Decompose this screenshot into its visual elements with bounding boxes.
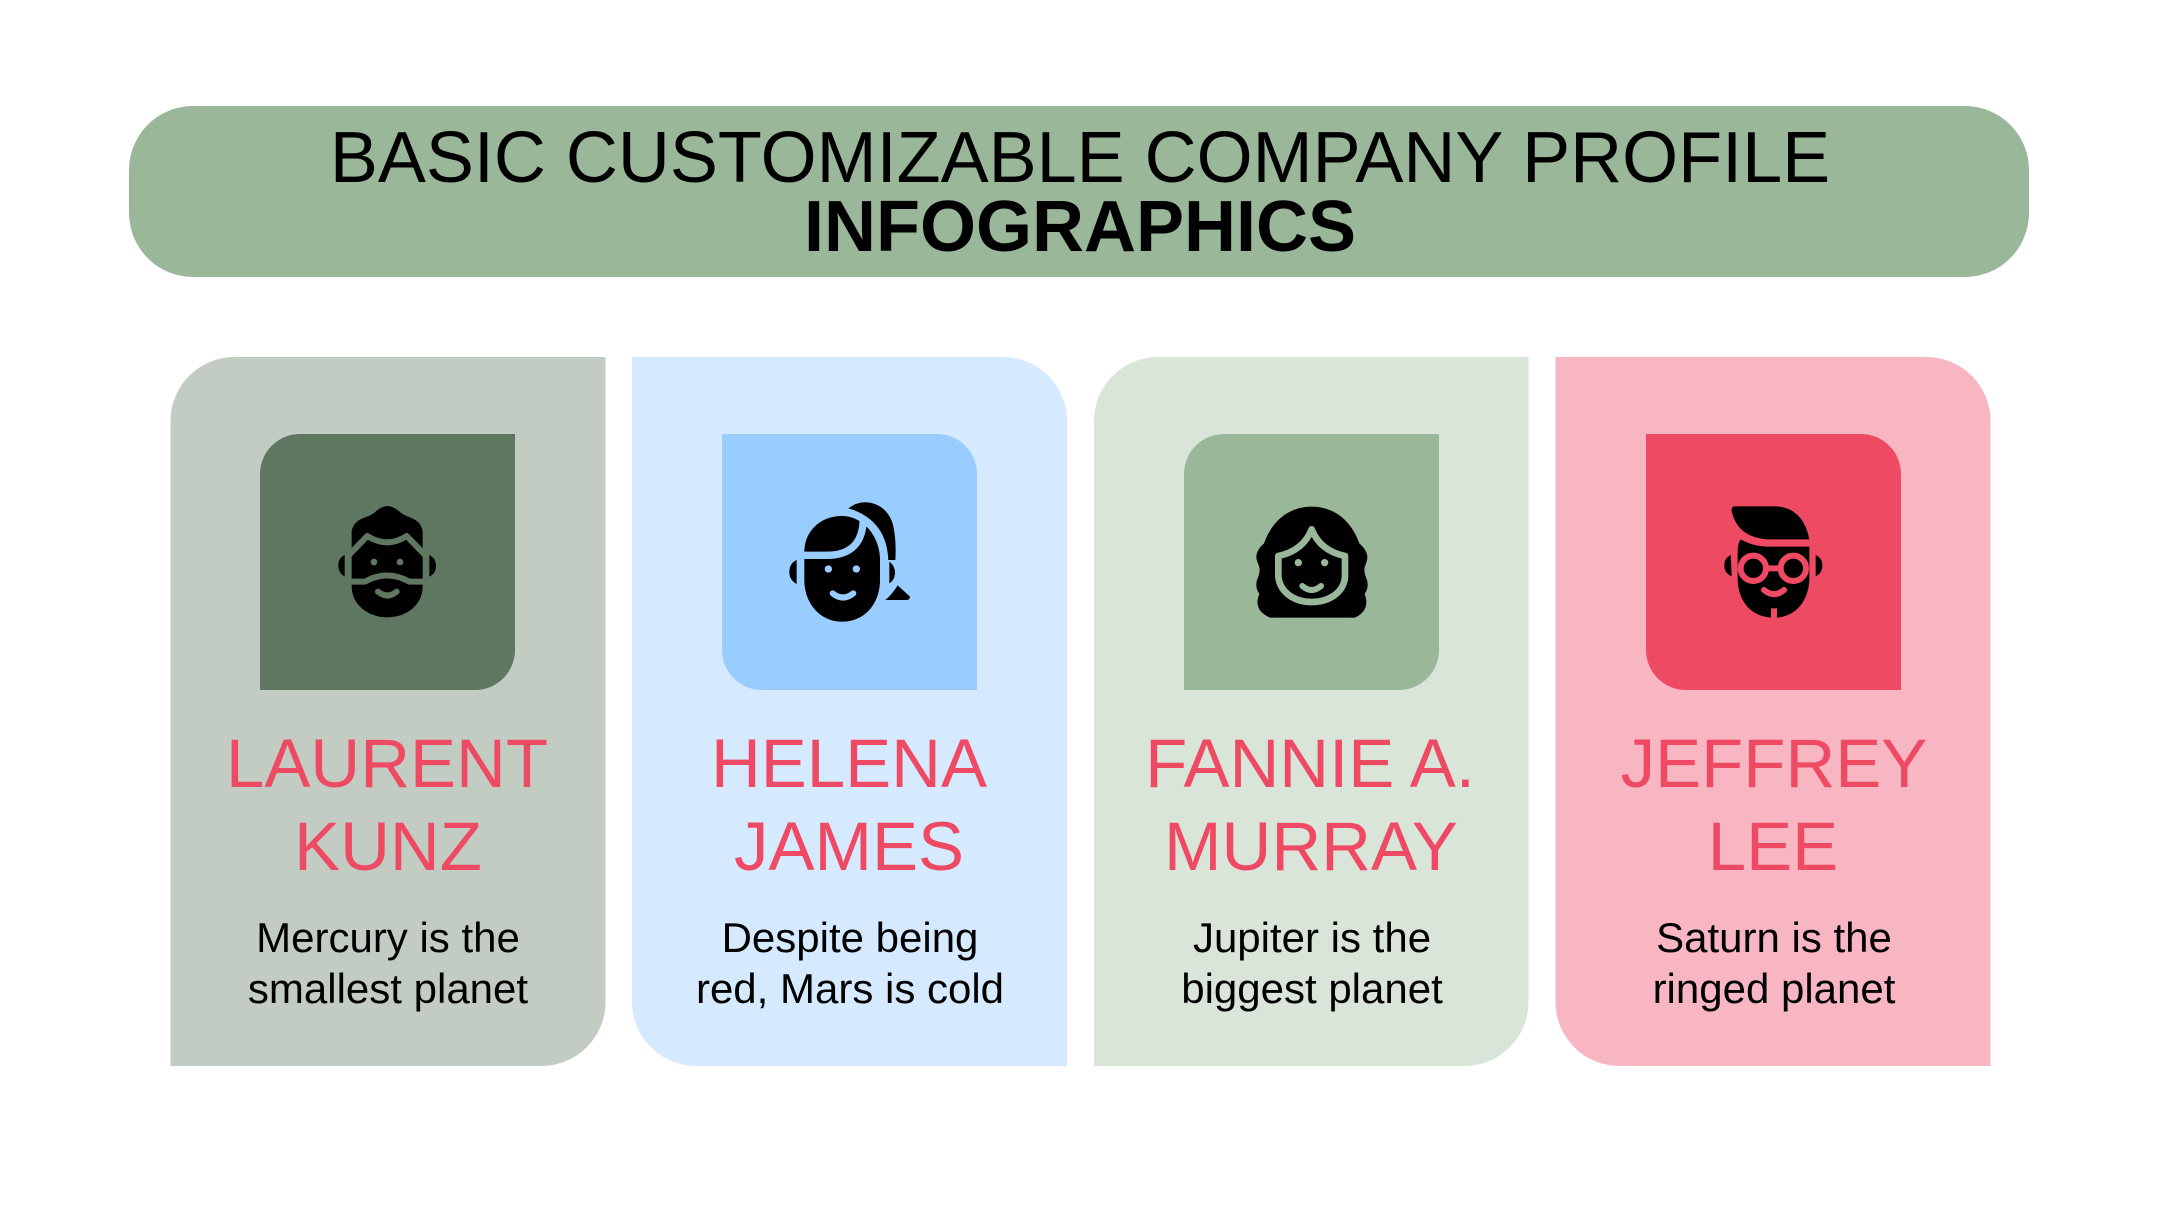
- description: ringed planet: [1653, 965, 1896, 1012]
- avatar tile: [1184, 434, 1439, 690]
- title line 1: BASIC CUSTOMIZABLE COMPANY PROFILE: [330, 118, 1830, 198]
- description: Jupiter is the: [1193, 914, 1431, 961]
- title banner: [129, 106, 2029, 277]
- description: [696, 914, 1004, 1012]
- avatar tile: [260, 434, 515, 690]
- description: Saturn is the: [1656, 914, 1892, 961]
- name: LEE: [1708, 808, 1838, 885]
- panel background: [1556, 357, 1990, 1066]
- icon: man with glasses: [1724, 506, 1822, 620]
- panel background: [632, 357, 1067, 1066]
- name: [711, 725, 987, 885]
- name: MURRAY: [1164, 808, 1458, 885]
- panel: Fannie A. Murray: [1094, 357, 1528, 1066]
- description: Mercury is the: [256, 914, 520, 961]
- name: JAMES: [734, 808, 964, 885]
- name: KUNZ: [294, 808, 482, 885]
- avatar tile: [722, 434, 977, 690]
- description: red, Mars is cold: [696, 965, 1004, 1012]
- name: [1621, 725, 1927, 885]
- name: FANNIE A.: [1145, 725, 1475, 802]
- icon: woman with wavy hair: [1256, 507, 1368, 618]
- name: JEFFREY: [1621, 725, 1927, 802]
- name: HELENA: [711, 725, 987, 802]
- icon: bearded man: [338, 506, 436, 617]
- description: [248, 914, 528, 1012]
- avatar tile: [1646, 434, 1901, 690]
- name: [1145, 725, 1475, 885]
- icon: woman with ponytail: [789, 502, 910, 622]
- description: Despite being: [722, 914, 978, 961]
- panel: Jeffrey Lee: [1556, 357, 1990, 1066]
- description: smallest planet: [248, 965, 528, 1012]
- panel background: [170, 357, 606, 1066]
- description: [1181, 914, 1443, 1012]
- panel background: [1094, 357, 1528, 1066]
- name: LAURENT: [226, 725, 548, 802]
- panel: Laurent Kunz: [170, 357, 606, 1066]
- panel: Helena James: [632, 357, 1067, 1066]
- name: [226, 725, 548, 885]
- description: biggest planet: [1181, 965, 1443, 1012]
- title line 2: INFOGRAPHICS: [804, 187, 1356, 267]
- description: [1653, 914, 1896, 1012]
